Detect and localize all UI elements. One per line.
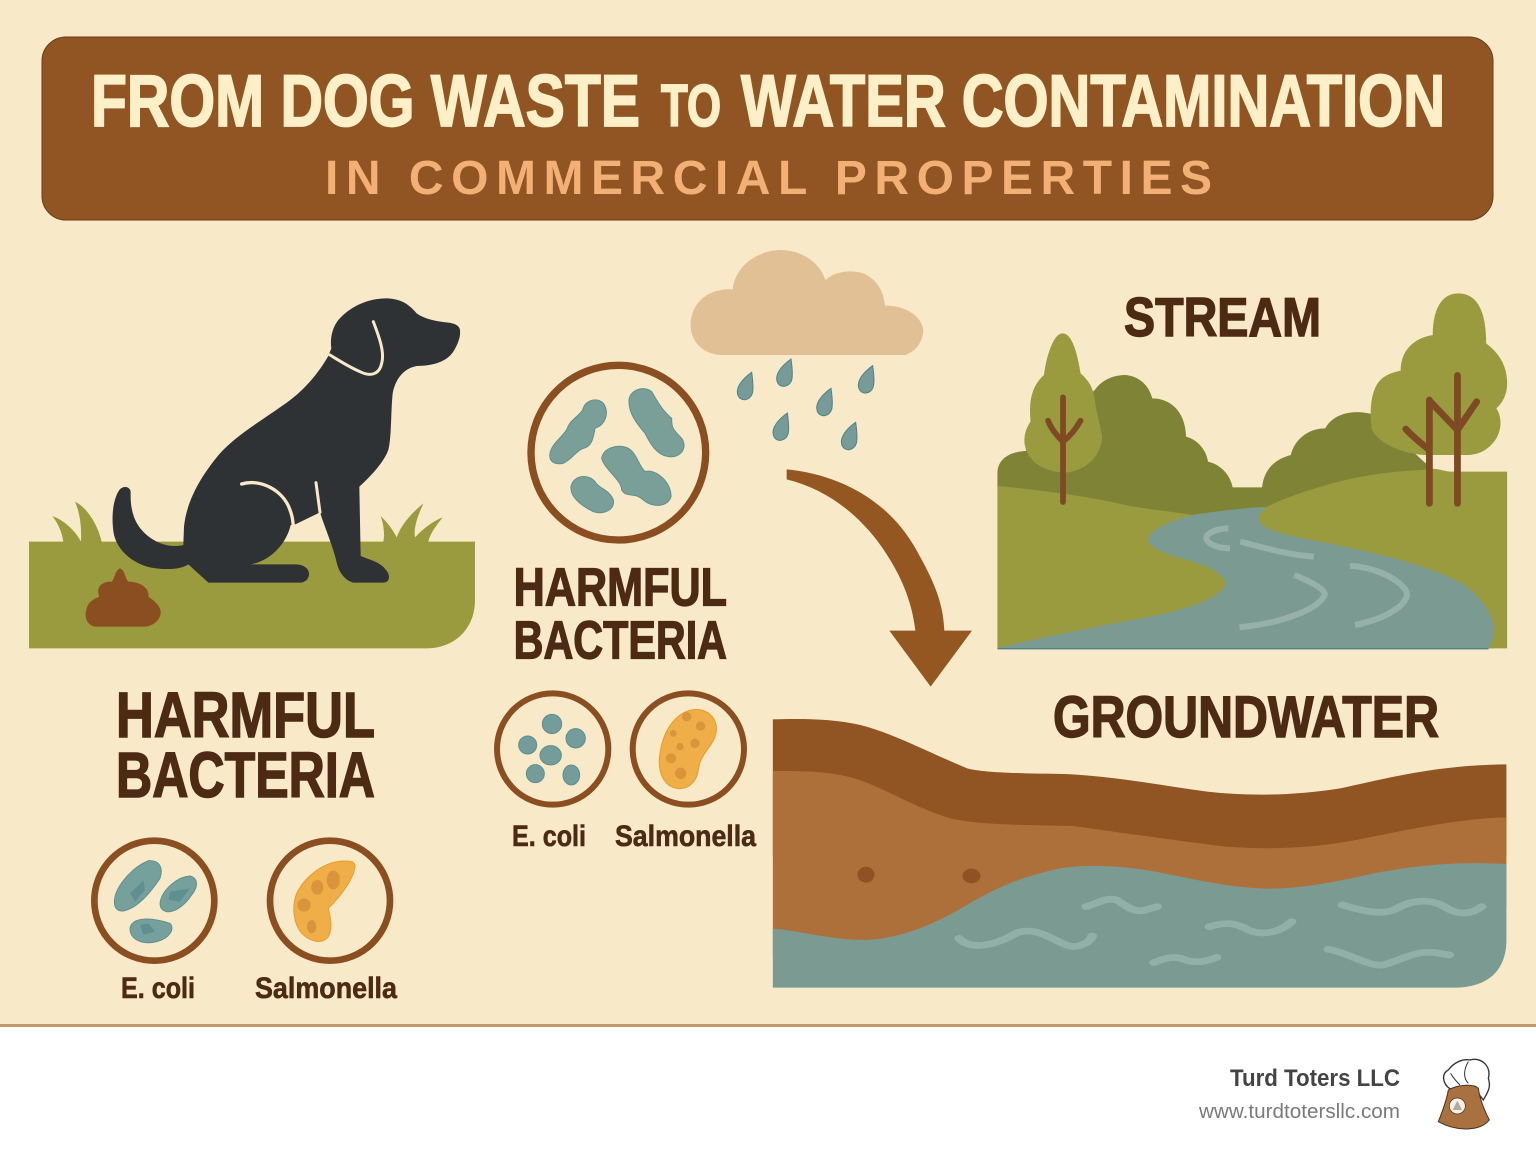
heading: main title xyxy=(91,61,1445,142)
heading: main title: TO xyxy=(661,73,721,139)
heading: harmful bacteria left: BACTERIA xyxy=(116,739,375,811)
heading: main title: FROM DOG WASTE xyxy=(91,61,640,142)
water layer xyxy=(773,863,1506,988)
icon: company logo bag xyxy=(1438,1059,1489,1129)
panel: stream scene xyxy=(997,293,1507,649)
footer xyxy=(0,1024,1536,1154)
heading: groundwater: GROUNDWATER xyxy=(1053,685,1439,750)
heading: subtitle: IN COMMERCIAL PROPERTIES xyxy=(325,152,1212,205)
panel: left bacteria icons xyxy=(94,841,390,961)
icon: large bacteria circle xyxy=(531,365,706,540)
icon: E. coli centre xyxy=(497,693,608,805)
icon: dog waste xyxy=(86,568,161,627)
panel: dog on grass xyxy=(29,298,475,648)
subsoil layer xyxy=(773,771,1506,957)
icon: dog silhouette xyxy=(113,298,460,583)
icon: E. coli left xyxy=(94,841,214,961)
heading: harmful bacteria left: HARMFUL xyxy=(116,679,375,751)
footer: company name: Turd Toters LLC xyxy=(1230,1065,1400,1092)
panel: harmful bacteria centre xyxy=(497,365,744,805)
heading: harmful bacteria centre xyxy=(514,558,727,671)
label: Salmonella centre: Salmonella xyxy=(615,820,756,853)
label: E. coli left: E. coli xyxy=(121,972,195,1005)
icon: rain cloud and arrow art xyxy=(691,250,972,687)
left tree xyxy=(1024,333,1102,502)
heading: stream: STREAM xyxy=(1124,286,1321,348)
footer: website: www.turdtotersllc.com xyxy=(1198,1101,1400,1123)
panel: groundwater cross-section xyxy=(773,719,1506,988)
topsoil layer xyxy=(773,719,1506,857)
title banner xyxy=(42,37,1493,220)
grass ground xyxy=(29,502,475,648)
label: E. coli centre: E. coli xyxy=(512,820,586,853)
right tree xyxy=(1371,293,1507,503)
river ripples xyxy=(1206,528,1407,627)
river xyxy=(997,507,1505,648)
cloud xyxy=(691,250,923,355)
heading: harmful bacteria centre: BACTERIA xyxy=(514,612,727,671)
river bottom edge xyxy=(997,647,1489,651)
right hill xyxy=(1259,469,1507,648)
icon: Salmonella centre xyxy=(633,693,744,805)
arrow: stream to groundwater xyxy=(787,469,972,687)
rain drops xyxy=(737,359,874,450)
heading: harmful bacteria left xyxy=(116,679,375,811)
left hill xyxy=(997,486,1226,648)
heading: harmful bacteria centre: HARMFUL xyxy=(514,558,727,617)
dark bushes xyxy=(997,375,1429,518)
label: Salmonella left: Salmonella xyxy=(255,972,397,1005)
water ripples xyxy=(959,899,1482,965)
icon: Salmonella left xyxy=(270,841,390,961)
soil pebbles xyxy=(857,867,980,883)
